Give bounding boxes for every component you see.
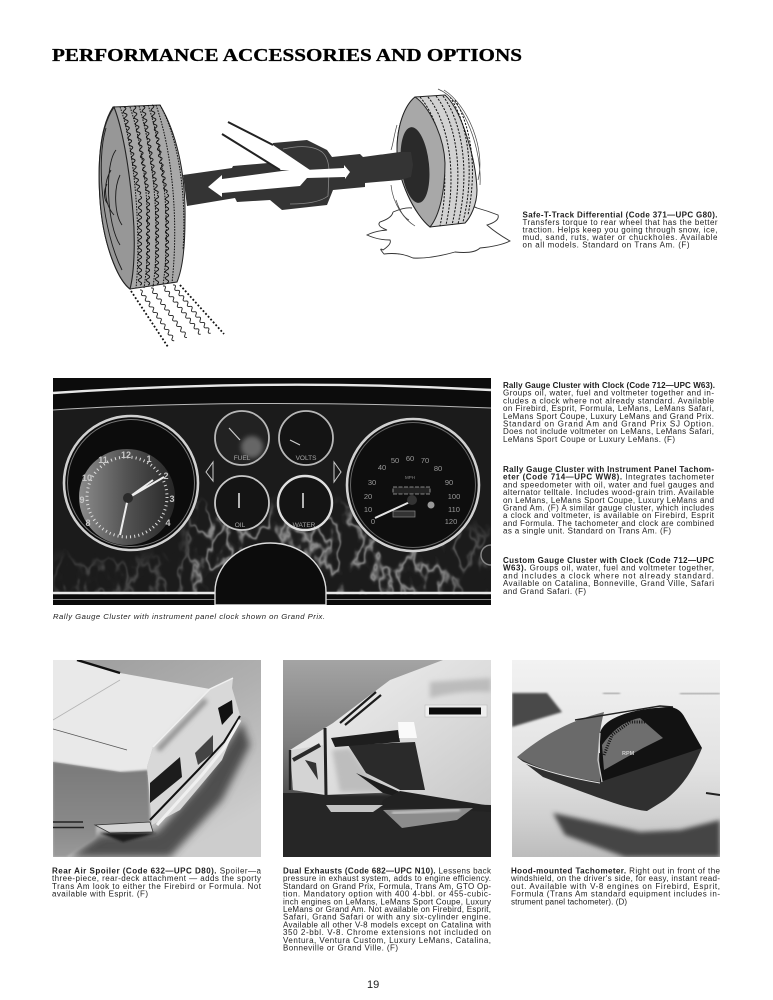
- glass dome: [517, 712, 604, 782]
- tread: [99, 105, 185, 289]
- speed numerals: 30: [368, 478, 376, 487]
- clock gauge: [64, 416, 198, 550]
- numerals: 3: [169, 494, 175, 504]
- left exhaust: [326, 805, 383, 812]
- text: hood-mounted tachometer: out. Available with V-8 engines on Firebird, Esprit,: [511, 882, 720, 891]
- license plate: [195, 735, 213, 765]
- text: Safe-T-Track Differential: Transfers torque to rear wheel that has the better: [522, 218, 718, 227]
- tread: [397, 95, 477, 227]
- sidewall: [99, 107, 134, 289]
- photo: rear air spoiler: [53, 660, 261, 857]
- speed numerals: 50: [391, 456, 399, 465]
- ground: [283, 793, 491, 857]
- Rally Gauge Cluster with Tachometer: and Formula. The tachometer and clock are combined: [503, 519, 714, 528]
- trim stripes: [53, 385, 491, 393]
- clock center: [123, 493, 133, 503]
- numerals: 9: [79, 495, 85, 505]
- text: dual exhausts: Safari, Grand Safari or with any six-cylinder engine.: [283, 913, 491, 922]
- dial: [279, 411, 333, 465]
- speed numerals: 110: [448, 505, 460, 514]
- page number: 19: [367, 979, 379, 991]
- dial face: [79, 449, 175, 545]
- illustration: rear axle with differential: [99, 89, 510, 347]
- vertical chrome strip: [325, 728, 326, 795]
- pillar highlight: [598, 733, 602, 782]
- numerals: 11: [98, 455, 108, 465]
- speedometer: [347, 419, 479, 551]
- right tail light: [218, 700, 233, 725]
- left dark bar: [293, 745, 320, 760]
- tach base shadow: [517, 748, 702, 811]
- text: dual exhausts: inch engines on LeMans, LeMans Sport Coupe, Luxury: [283, 897, 491, 906]
- left vertical strip: [289, 750, 291, 790]
- text: dual exhausts: Ventura, Ventura Custom, Luxury LeMans, Catalina,: [283, 936, 491, 945]
- exhaust highlight: [392, 810, 460, 813]
- text: dual exhausts: 350 2-bbl. V-8. Chrome extensions not included on: [283, 928, 491, 937]
- rpm label: RPM: [622, 751, 635, 757]
- speed numerals: 40: [378, 463, 386, 472]
- speed numerals: 0: [371, 517, 375, 526]
- glare: [241, 436, 263, 458]
- text: rear air spoiler: Trans Am look to either the Firebird or Formula. Not: [52, 882, 262, 891]
- photo: hood-mounted tachometer: [512, 660, 720, 857]
- Custom Gauge Cluster with Clock: Custom Gauge Cluster with Clock (Code 712—UPC: [503, 556, 714, 565]
- dial face: [602, 718, 663, 770]
- numerals: 4: [165, 518, 171, 528]
- speed numerals: 120: [445, 517, 457, 526]
- hub: [397, 126, 433, 204]
- lower bumper black line: [150, 716, 240, 820]
- text: Safe-T-Track Differential: traction. Helps keep you going through snow, ice,: [522, 226, 718, 235]
- Rally Gauge Cluster with Clock: Groups oil, water, fuel and voltmeter together and in-: [503, 389, 714, 398]
- dark reflection: [512, 693, 562, 727]
- Custom Gauge Cluster with Clock: and includes a clock where not already standard.: [503, 571, 714, 580]
- odometer: [393, 487, 430, 494]
- water puddle: [367, 207, 510, 258]
- curved sill shadow: [356, 773, 423, 803]
- body shading: [430, 678, 491, 698]
- Custom Gauge Cluster with Clock: W63). Groups oil, water, fuel and voltmeter together,: [503, 564, 714, 573]
- right exhaust: [383, 808, 473, 828]
- water gauge: [278, 476, 332, 530]
- text: dual exhausts: Standard on Grand Prix, Formula, Trans Am, GTO Op-: [283, 882, 491, 891]
- Rally Gauge Cluster with Clock: Does not include voltmeter on LeMans, LeMans Safari,: [503, 427, 714, 436]
- title: PERFORMANCE ACCESSORIES AND OPTIONS: [52, 45, 522, 65]
- side bumper shadow: [100, 833, 157, 842]
- background: [53, 660, 261, 857]
- wood grain: [53, 500, 490, 594]
- photo: dual exhausts: [283, 660, 491, 857]
- vent frame: [425, 705, 487, 717]
- text: dual exhausts: [283, 866, 492, 952]
- Rally Gauge Cluster with Tachometer: eter (Code 714—UPC WW8). Integrates tachometer: [503, 473, 714, 482]
- differential housing detail: [283, 147, 329, 204]
- rear panel: [147, 678, 240, 825]
- numerals: 1: [146, 454, 152, 464]
- dial: [215, 476, 269, 530]
- Rally Gauge Cluster with Clock: LeMans Sport Coupe or Luxury LeMans. (F): [503, 435, 675, 444]
- text: hood-mounted tachometer: Hood-mounted Tachometer. Right out in front of the: [511, 866, 721, 876]
- text: dual exhausts: Available all other V-8 models except on Catalina with: [283, 920, 491, 929]
- text: dual exhausts: tion. Mandatory option with 400 4-bbl. or 455-cubic-: [283, 890, 491, 899]
- voltmeter gauge: [279, 411, 333, 465]
- lower body side: [53, 762, 150, 857]
- dome top edge: [575, 706, 673, 720]
- text: rear air spoiler: [52, 866, 262, 899]
- Rally Gauge Cluster with Tachometer: Grand Am. (F) A similar gauge cluster, which includes: [503, 504, 714, 512]
- speed numerals: 100: [448, 492, 460, 501]
- oil gauge: [215, 476, 269, 530]
- needle: [238, 493, 240, 508]
- Custom Gauge Cluster with Clock: [503, 556, 714, 596]
- Custom Gauge Cluster with Clock: Available on Catalina, Bonneville, Grand Ville, Safari: [503, 579, 714, 588]
- spoiler highlight: [153, 678, 233, 747]
- text: dual exhausts: Dual Exhausts (Code 682—UPC N10). Lessens back: [283, 866, 492, 876]
- tread edge lines: [120, 105, 184, 288]
- label: VOLTS: [296, 455, 317, 462]
- numerals: [79, 450, 175, 528]
- lower bumper chrome: [157, 720, 240, 825]
- chrome rim: [347, 419, 479, 551]
- text: dual exhausts: pressure in exhaust system, adds to engine efficiency.: [283, 874, 491, 883]
- outer ring line: [68, 420, 194, 546]
- mph label: MPH: [405, 475, 415, 480]
- recess: [348, 742, 425, 790]
- dome rim: [518, 760, 600, 783]
- speed numerals: 90: [445, 478, 453, 487]
- chrome shading: [332, 748, 395, 792]
- background: [283, 660, 491, 800]
- label: OIL: [235, 522, 246, 529]
- deck crease line: [53, 680, 120, 720]
- dial: [278, 476, 332, 530]
- text: Safe-T-Track Differential: [522, 210, 718, 250]
- trip odometer: [393, 511, 415, 517]
- Rally Gauge Cluster with Tachometer: and speedometer with oil, water and fuel gauges and: [503, 480, 714, 489]
- deck panel line: [53, 729, 127, 750]
- wood panel: [53, 403, 491, 592]
- needle hub: [407, 495, 417, 505]
- hood shadow band: [553, 813, 720, 857]
- text: hood-mounted tachometer: [510, 866, 721, 906]
- text: hood-mounted tachometer: strument panel tachometer). (D): [511, 897, 627, 906]
- left tail light housing: [291, 745, 325, 793]
- speed numerals: 70: [421, 456, 429, 465]
- clock hands: [120, 477, 164, 535]
- text: hood-mounted tachometer: Formula (Trans Am standard equipment includes in-: [511, 890, 720, 899]
- tread grooves: [420, 96, 472, 226]
- numerals: 8: [85, 518, 91, 528]
- Rally Gauge Cluster with Tachometer: [503, 465, 715, 536]
- upper ridge: [340, 692, 381, 725]
- double-headed power arrow: [208, 165, 350, 197]
- outer ring line: [350, 422, 476, 548]
- side mark: [706, 793, 720, 795]
- sidewall: [397, 97, 445, 227]
- side trim: [53, 822, 84, 828]
- chrome rim: [64, 416, 198, 550]
- upper black strip: [77, 660, 120, 673]
- text: Safe-T-Track Differential: mud, sand, ruts, water or chuckholes. Available: [522, 233, 718, 242]
- text: gauge options: [503, 381, 715, 596]
- needle: [375, 501, 412, 518]
- left tire: [99, 105, 185, 289]
- speed numerals: 10: [364, 505, 372, 514]
- Rally Gauge Cluster with Tachometer: alternator telltale. Includes wood-grain trim. Available: [503, 488, 715, 497]
- bumper highlight: [398, 722, 417, 738]
- hub rings: [101, 128, 122, 270]
- deck and upper body: [53, 660, 210, 775]
- text: hood-mounted tachometer: windshield, on the driver's side, for easy, instant read-: [510, 874, 720, 883]
- caption: gauge photo: Rally Gauge Cluster with instrument panel clock shown on Grand Prix.: [53, 612, 325, 621]
- photo: instrument panel gauges: [53, 378, 501, 606]
- Rally Gauge Cluster with Clock: cludes a clock where not already standard. Available: [503, 396, 715, 405]
- left turn arrow: [206, 462, 213, 481]
- side bumper: [95, 822, 153, 833]
- reset knob: [428, 502, 434, 508]
- Rally Gauge Cluster with Tachometer: as a single unit. Standard on Trans Am. (F): [503, 527, 671, 536]
- dial ticks: [604, 722, 646, 755]
- vent: [429, 708, 481, 714]
- needle: [229, 428, 240, 440]
- speed numerals: 60: [406, 454, 414, 463]
- text: rear air spoiler: available with Esprit. (F): [52, 890, 148, 899]
- car body: [290, 660, 491, 805]
- Rally Gauge Cluster with Clock: Rally Gauge Cluster with Clock (Code 712—UPC W63).: [503, 381, 715, 390]
- text: rear air spoiler: three-piece, rear-deck attachment — adds the sporty: [52, 874, 261, 883]
- dial hood: [600, 707, 702, 782]
- right tire: [391, 89, 480, 227]
- text: dual exhausts: LeMans or Grand Am. Not available on Firebird, Esprit,: [283, 905, 491, 914]
- numerals: 12: [121, 450, 131, 460]
- left tail light: [150, 757, 182, 803]
- text: Safe-T-Track Differential: Safe-T-Track Differential (Code 371—UPC G80).: [522, 210, 718, 220]
- label: FUEL: [234, 455, 251, 462]
- background: [512, 660, 720, 857]
- tread grooves: [122, 105, 169, 285]
- center ashtray dome: [215, 543, 326, 605]
- Rally Gauge Cluster with Clock: [503, 381, 715, 444]
- left dark patch: [305, 760, 318, 780]
- side knob: [481, 545, 501, 565]
- dash background: [53, 378, 491, 605]
- needle: [302, 493, 304, 508]
- Rally Gauge Cluster with Tachometer: on LeMans, LeMans Sport Coupe, Luxury LeMans and: [503, 496, 714, 505]
- drive shaft edges: [222, 122, 280, 170]
- speed numerals: 80: [434, 464, 442, 473]
- spin lines: [391, 89, 480, 226]
- top bumper bar: [331, 730, 400, 747]
- Rally Gauge Cluster with Clock: Standard on Grand Am and Grand Prix SJ Option.: [503, 420, 714, 428]
- Rally Gauge Cluster with Tachometer: Rally Gauge Cluster with Instrument Panel Tachom-: [503, 465, 714, 474]
- drive shaft: [222, 122, 310, 170]
- Rally Gauge Cluster with Clock: on Firebird, Esprit, Formula, LeMans, LeMans Safari,: [503, 404, 714, 413]
- dial: [215, 411, 269, 465]
- tick marks: [87, 457, 167, 537]
- text: rear air spoiler: Rear Air Spoiler (Code 632—UPC D80). Spoiler—a: [52, 866, 262, 876]
- speed numerals: 20: [364, 492, 372, 501]
- label: WATER: [293, 522, 316, 529]
- right turn arrow: [334, 462, 341, 482]
- speed numerals: [364, 454, 460, 526]
- under tray: [380, 791, 491, 812]
- Rally Gauge Cluster with Tachometer: a clock and voltmeter, is available on Firebird, Esprit: [503, 511, 715, 520]
- text: dual exhausts: Bonneville or Grand Ville. (F): [283, 944, 398, 952]
- axle and differential housing: [183, 140, 413, 210]
- ground shadow: [70, 722, 250, 857]
- fuel gauge: [215, 411, 269, 465]
- distant marks: [603, 693, 720, 694]
- left tire tracks: [131, 284, 224, 347]
- Custom Gauge Cluster with Clock: and Grand Safari. (F): [503, 587, 586, 596]
- numerals: 10: [82, 473, 92, 483]
- fold shadow: [158, 700, 206, 750]
- text: Safe-T-Track Differential: on all models. Standard on Trans Am. (F): [522, 241, 690, 250]
- numerals: 2: [163, 471, 169, 481]
- Rally Gauge Cluster with Clock: LeMans Sport Coupe, Luxury LeMans and Grand Prix.: [503, 412, 714, 421]
- needle: [290, 440, 300, 445]
